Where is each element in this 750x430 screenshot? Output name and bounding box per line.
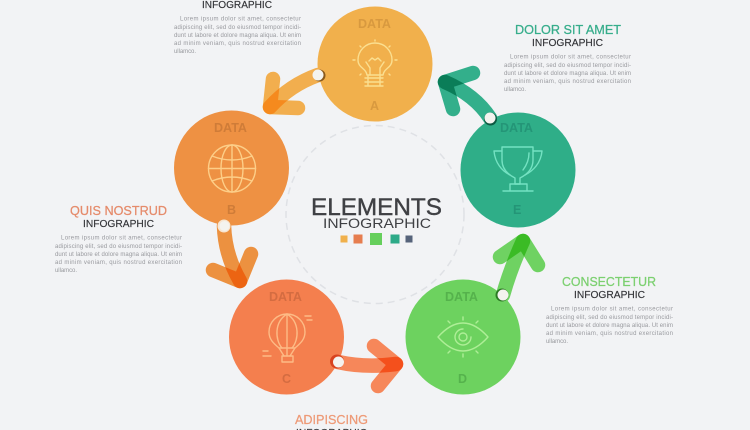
body copy: Lorem ipsum dolor sit amet, consectetur (180, 16, 301, 22)
body copy: dunt ut labore et dolore magna aliqua. Ut enim (174, 33, 301, 39)
label: data C: DATA (269, 290, 302, 304)
heading: ADIPISCING (295, 413, 368, 427)
body copy: ullamco. (504, 87, 526, 93)
letter A: A (370, 99, 379, 113)
body copy: adipiscing elit, sed do eiusmod tempor incidi- (174, 25, 301, 31)
text block: step C (295, 413, 368, 430)
body copy: Lorem ipsum dolor sit amet, consectetur (61, 236, 182, 242)
heading: elements: ELEMENTS (311, 194, 442, 221)
arrow: B to C (213, 220, 251, 281)
center dashed ring (286, 126, 464, 304)
body copy (55, 236, 182, 274)
arrow: A to B (270, 70, 326, 108)
label: data D: DATA (445, 290, 478, 304)
label: data B: DATA (214, 121, 247, 135)
panel: step D (406, 280, 520, 394)
body copy (174, 16, 301, 55)
label: data E: DATA (500, 121, 533, 135)
subheading: INFOGRAPHIC (83, 219, 154, 230)
letter C: C (282, 372, 291, 386)
heading: DOLOR SIT AMET (515, 23, 621, 37)
body copy: adipiscing elit, sed do eiusmod tempor incidi- (504, 63, 631, 69)
heading: CONSECTETUR (562, 275, 656, 289)
text block: step A (174, 0, 301, 55)
subheading: INFOGRAPHIC (202, 0, 272, 11)
body copy: Lorem ipsum dolor sit amet, consectetur (510, 54, 631, 60)
text block: step D (546, 275, 673, 345)
subheading: infographic: INFOGRAPHIC (323, 215, 431, 231)
icon: light bulb (353, 40, 397, 86)
body copy: ad minim veniam, quis nostrud exercitation (55, 260, 182, 266)
arrow: E to A (445, 73, 497, 126)
letter B: B (227, 203, 236, 217)
icon: hot air balloon (263, 314, 312, 362)
heading: QUIS NOSTRUD (70, 204, 167, 218)
body copy (546, 306, 673, 345)
letter D: D (458, 372, 467, 386)
panel: step C (229, 280, 344, 394)
body copy: adipiscing elit, sed do eiusmod tempor incidi- (546, 315, 673, 321)
panel: step E (460, 112, 576, 228)
body copy: ad minim veniam, quis nostrud exercitation (546, 331, 673, 337)
body copy: ullamco. (546, 339, 568, 345)
subheading: INFOGRAPHIC (532, 38, 603, 49)
colour squares (340, 233, 412, 245)
center title (311, 194, 442, 245)
icon: eye (438, 317, 488, 357)
body copy: adipiscing elit, sed do eiusmod tempor incidi- (55, 244, 182, 250)
icon: trophy (494, 147, 542, 191)
body copy: ad minim veniam, quis nostrud exercitation (174, 41, 301, 47)
icon: globe (208, 145, 256, 192)
body copy: Lorem ipsum dolor sit amet, consectetur (551, 306, 673, 312)
body copy (504, 54, 631, 93)
panel: step A (318, 6, 432, 122)
body copy: dunt ut labore et dolore magna aliqua. Ut enim (504, 71, 631, 77)
arrow: C to D (330, 346, 396, 386)
body copy: ullamco. (55, 268, 77, 274)
body copy: ullamco. (174, 49, 196, 55)
arrow: D to E (496, 241, 538, 302)
subheading: INFOGRAPHIC (574, 290, 645, 301)
panel: step B (174, 110, 289, 226)
label: data A: DATA (358, 17, 391, 31)
body copy: dunt ut labore et dolore magna aliqua. Ut enim (55, 252, 182, 258)
body copy: dunt ut labore et dolore magna aliqua. Ut enim (546, 323, 673, 329)
letter E: E (513, 203, 521, 217)
text block: step E (504, 23, 631, 93)
text block: step B (55, 204, 182, 274)
body copy: ad minim veniam, quis nostrud exercitation (504, 79, 631, 85)
